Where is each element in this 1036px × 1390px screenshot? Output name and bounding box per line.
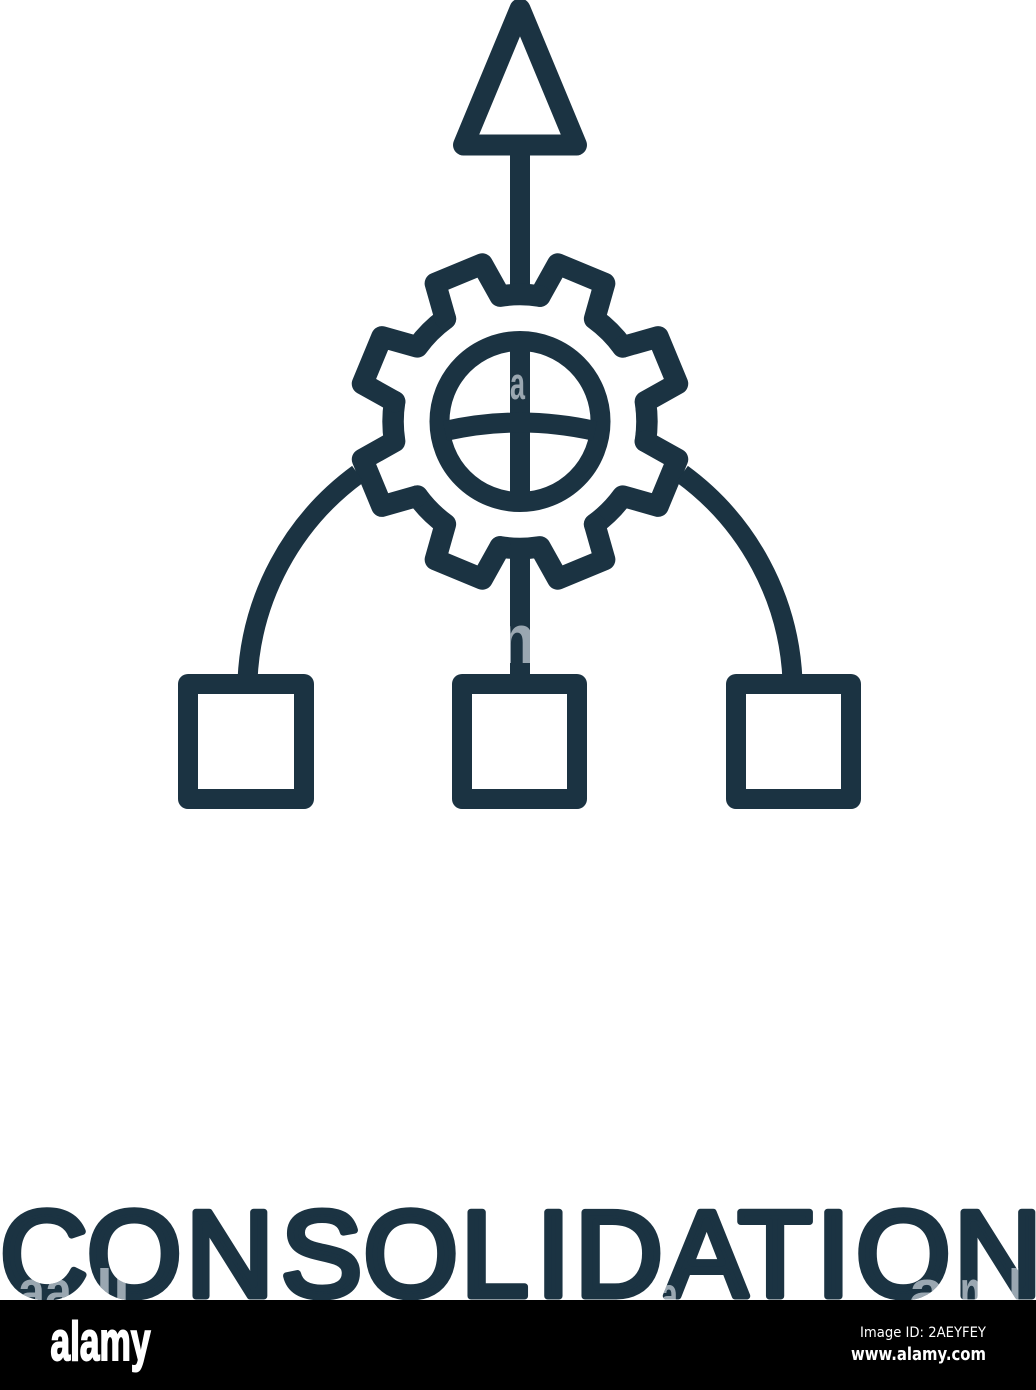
box: right [736, 684, 851, 799]
footer bar [0, 1300, 1036, 1390]
image id: Image ID: 2AEYFEY [860, 1325, 986, 1341]
connectors from boxes to gear [248, 474, 792, 684]
watermark fragments: l [1008, 1258, 1022, 1325]
icon: gear with globe [336, 238, 704, 605]
watermark fragments: ll [96, 1258, 130, 1325]
watermark fragments [18, 358, 1022, 1325]
title: CONSOLIDATION [0, 1186, 1036, 1322]
globe [440, 341, 600, 502]
watermark fragments: a [909, 1258, 946, 1325]
logo: alamy [50, 1310, 151, 1372]
arrow: upward triangle with stem [464, 9, 576, 295]
website: www.alamy.com [851, 1345, 986, 1365]
box: centre [462, 684, 577, 799]
watermark fragments: aa [18, 1258, 73, 1325]
icon: consolidation diagram [188, 9, 851, 799]
watermark fragments: a [510, 358, 526, 409]
watermark fragments: n [960, 1258, 982, 1325]
box: left [188, 684, 304, 799]
watermark fragments: a [660, 1267, 679, 1323]
watermark fragments: m [497, 600, 557, 678]
gear outline [336, 238, 704, 605]
